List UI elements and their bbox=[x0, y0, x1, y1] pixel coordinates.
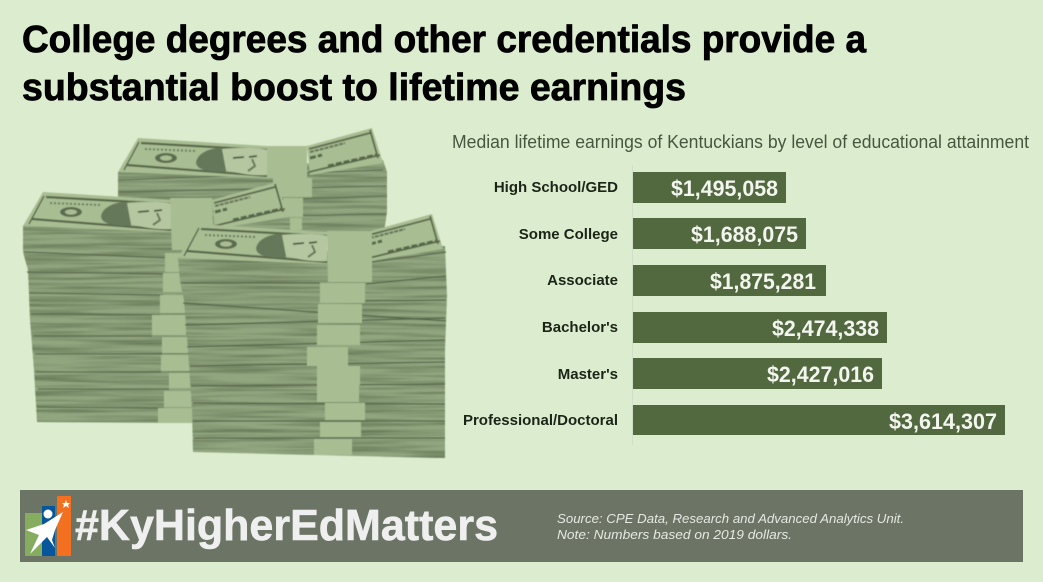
stack: back bbox=[118, 128, 387, 232]
row: Master's bbox=[558, 358, 882, 389]
stack: left bbox=[23, 182, 290, 423]
title: substantial boost to lifetime earnings bbox=[22, 67, 686, 109]
title: College degrees and other credentials provide a bbox=[22, 19, 867, 61]
row: Bachelor's: $2,474,338 bbox=[772, 316, 879, 341]
row: Some College: $1,688,075 bbox=[691, 222, 798, 247]
row: Bachelor's: Bachelor's bbox=[542, 319, 618, 336]
source note: Source: CPE Data, Research and Advanced Analytics Unit. bbox=[557, 511, 904, 526]
row: High School/GED: $1,495,058 bbox=[671, 176, 778, 201]
row: Professional/Doctoral bbox=[463, 405, 1005, 435]
row: Professional/Doctoral: Professional/Doctoral bbox=[463, 412, 618, 429]
row: Master's: $2,427,016 bbox=[767, 362, 874, 387]
row: High School/GED: High School/GED bbox=[494, 179, 618, 196]
source note bbox=[557, 511, 904, 542]
row: High School/GED bbox=[494, 172, 786, 203]
row: Associate: Associate bbox=[547, 272, 618, 289]
stack: front bbox=[178, 214, 447, 458]
row: Professional/Doctoral: $3,614,307 bbox=[889, 409, 997, 434]
title bbox=[22, 19, 867, 109]
row: Master's: Master's bbox=[558, 366, 618, 383]
row: Some College: Some College bbox=[519, 226, 618, 243]
hashtag: #KyHigherEdMatters bbox=[75, 501, 498, 550]
row: Associate: $1,875,281 bbox=[710, 269, 816, 294]
icon: KY higher ed logo bbox=[25, 496, 71, 556]
row: Associate bbox=[547, 265, 826, 296]
illustration: stacks of money bbox=[23, 128, 447, 458]
bar chart bbox=[463, 165, 1005, 445]
row: Bachelor's bbox=[542, 312, 887, 343]
chart title: Median lifetime earnings of Kentuckians by level of educational attainment bbox=[452, 132, 1029, 152]
footer banner bbox=[20, 490, 1023, 562]
source note: Note: Numbers based on 2019 dollars. bbox=[557, 527, 792, 542]
row: Some College bbox=[519, 218, 806, 249]
